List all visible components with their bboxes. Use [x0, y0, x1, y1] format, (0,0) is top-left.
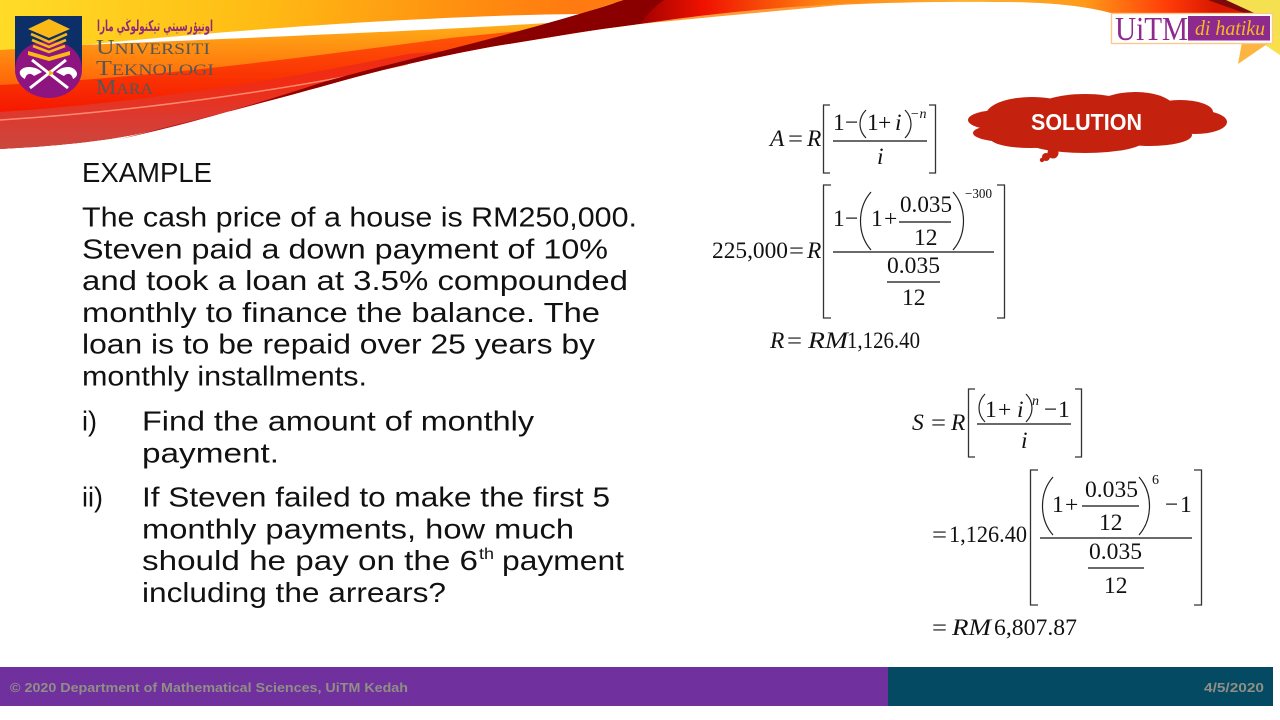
formula: substitution for S: 12 — [1099, 510, 1122, 536]
cloud tail bubbles — [1040, 148, 1058, 162]
formula: substitution for R: R — [806, 238, 821, 264]
formula: substitution for R: 0.035 — [900, 192, 952, 218]
question i: payment. — [142, 437, 279, 468]
formula: present value of annuity: + — [878, 110, 891, 136]
problem statement: Steven paid a down payment of 10% — [82, 233, 608, 264]
header ribbon — [0, 0, 1280, 149]
example heading: EXAMPLE — [82, 157, 212, 188]
question ii: If Steven failed to make the first 5 — [142, 482, 610, 512]
formula: future value of annuity — [912, 389, 1082, 457]
university wordmark — [96, 17, 214, 99]
ribbon: yellow upper band — [0, 0, 624, 52]
name line 1: UNIVERSITI — [96, 35, 210, 59]
formula: substitution for R: 0.035 — [887, 253, 940, 279]
question ii: th — [479, 546, 494, 563]
formula: future value of annuity: n — [1032, 394, 1039, 409]
formula: substitution for S: 6 — [1152, 473, 1159, 488]
formula: substitution for R: 12 — [914, 225, 938, 251]
ribbon: orange lower band — [0, 23, 640, 149]
formula: present value of annuity: 1 — [833, 110, 845, 136]
formula: substitution for S: = — [932, 522, 947, 548]
footer: copyright: © 2020 Department of Mathematical Sciences, UiTM Kedah — [10, 681, 408, 695]
formula: substitution for R: −300 — [965, 187, 992, 202]
formula: substitution for S: 0.035 — [1085, 477, 1138, 503]
ribbon: orange streak — [640, 3, 860, 24]
ribbon: crimson lower layer — [0, 47, 490, 149]
formula: substitution for S: 1 — [1180, 492, 1192, 518]
formula: future value of annuity: R — [950, 410, 965, 436]
formula: present value of annuity: 1 — [867, 110, 879, 136]
formula: substitution for S: 0.035 — [1089, 539, 1142, 565]
cloud body — [968, 92, 1227, 153]
crest: navy shield — [15, 16, 82, 68]
formula: future value of annuity: − — [1044, 397, 1057, 423]
result: total payment: RM — [951, 615, 993, 641]
ribbon: top right yellow stripes — [1222, 0, 1280, 43]
formula: substitution for R: 1 — [871, 206, 883, 232]
badge: frame — [1112, 14, 1272, 44]
question ii: payment — [502, 545, 624, 576]
result: total payment — [932, 615, 1077, 641]
formula: substitution for S: 1,126.40 — [949, 522, 1027, 548]
badge: di hatiku: di hatiku — [1195, 16, 1265, 40]
formula: present value of annuity: i — [895, 110, 902, 136]
question ii — [82, 482, 624, 608]
result: total payment: 6,807.87 — [994, 615, 1077, 641]
result: monthly payment: = — [787, 328, 802, 354]
problem statement — [82, 202, 637, 391]
formula: future value of annuity: = — [931, 410, 946, 436]
question ii: monthly payments, how much — [142, 513, 574, 544]
question i: Find the amount of monthly — [142, 406, 534, 436]
formula: substitution for S: + — [1065, 492, 1078, 518]
problem statement: and took a loan at 3.5% compounded — [82, 265, 628, 296]
crest: centre gem — [49, 70, 54, 76]
footer bar — [0, 667, 1273, 706]
formula: substitution for S: 12 — [1104, 573, 1128, 599]
formula: substitution for R: = — [789, 238, 804, 264]
name line 3: MARA — [96, 75, 153, 99]
question i — [82, 406, 534, 468]
crest: gold base — [28, 51, 70, 61]
question ii: including the arrears? — [142, 577, 446, 608]
crest: gold chevrons — [31, 34, 67, 52]
result: monthly payment — [769, 328, 920, 354]
formula: substitution for S: − — [1165, 492, 1178, 518]
badge: pointer — [1238, 42, 1270, 64]
formula: future value of annuity: S — [912, 410, 924, 436]
formula: substitution for S — [932, 470, 1202, 605]
formula: substitution for R: 12 — [902, 285, 926, 311]
question ii: should he pay on the 6 — [142, 545, 478, 576]
formula: present value of annuity — [768, 105, 936, 173]
crest: gold diamond — [28, 19, 70, 38]
formula: substitution for R: 1 — [833, 206, 845, 232]
formula: future value of annuity: + — [998, 397, 1011, 423]
formula: future value of annuity: i — [1021, 428, 1028, 454]
result: monthly payment: 1,126.40 — [847, 328, 920, 354]
question ii: ii) — [82, 482, 103, 512]
UiTM di hatiku badge — [1112, 11, 1272, 64]
formula: future value of annuity: i — [1017, 397, 1024, 423]
problem statement: monthly to finance the balance. The — [82, 297, 600, 328]
footer: purple panel — [0, 667, 888, 706]
formula: present value of annuity: A — [768, 126, 785, 152]
problem statement: loan is to be repaid over 25 years by — [82, 329, 595, 360]
problem statement: The cash price of a house is RM250,000. — [82, 202, 637, 232]
UiTM crest logo — [15, 16, 82, 98]
solution cloud callout — [968, 92, 1227, 162]
formula: future value of annuity: 1 — [1058, 397, 1070, 423]
badge: purple panel — [1188, 16, 1270, 40]
ribbon: right sweep — [612, 0, 1262, 43]
formula: present value of annuity: = — [788, 126, 803, 152]
formula: present value of annuity: i — [877, 144, 884, 170]
name line 2: TEKNOLOGI — [96, 56, 214, 80]
badge: UiTM: UiTM — [1115, 11, 1188, 48]
formula: substitution for R: 225,000 — [712, 238, 788, 264]
ribbon: top right dark stripe — [1208, 0, 1265, 20]
jawi name: اونيۏرسيتي تيكنولوڬي مارا — [97, 17, 213, 35]
formula: substitution for S: 1 — [1052, 492, 1064, 518]
solution label: SOLUTION — [1031, 109, 1142, 135]
ribbon: pale streak — [0, 64, 408, 120]
formula: present value of annuity: − — [845, 110, 858, 136]
formula: substitution for R: + — [884, 206, 897, 232]
formula: future value of annuity: 1 — [985, 397, 997, 423]
ribbon: dark red edge — [120, 0, 664, 139]
formula: present value of annuity: −n — [910, 107, 926, 122]
result: monthly payment: RM — [807, 328, 850, 354]
question i: i) — [82, 406, 97, 436]
result: total payment: = — [932, 615, 947, 641]
crest: crossed white keris — [30, 60, 68, 88]
ribbon: yellow tail — [1262, 36, 1280, 55]
result: monthly payment: R — [769, 328, 784, 354]
footer: teal panel — [888, 667, 1273, 706]
ribbon: red lower band — [0, 24, 640, 149]
formula: substitution for R — [712, 185, 1004, 318]
crest: purple disc — [15, 41, 82, 98]
problem statement: monthly installments. — [82, 360, 367, 391]
formula: substitution for R: − — [845, 206, 858, 232]
crest: white hilts — [20, 67, 77, 79]
formula: present value of annuity: R — [806, 126, 821, 152]
footer: date: 4/5/2020 — [1204, 681, 1264, 695]
